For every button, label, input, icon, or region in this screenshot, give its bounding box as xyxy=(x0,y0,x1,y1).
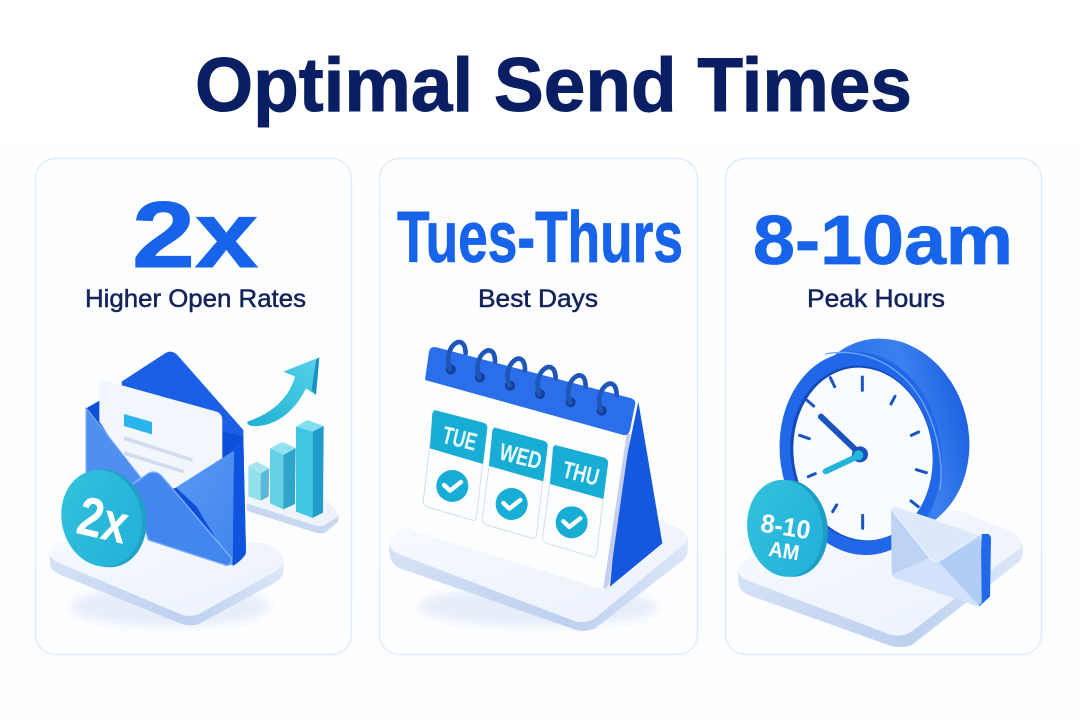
day card: thu xyxy=(542,445,608,557)
calendar top bar xyxy=(425,347,635,435)
stat: 2x: 2x xyxy=(132,182,258,287)
panel: best days xyxy=(380,158,698,654)
illustration: clock with envelope xyxy=(738,321,1023,647)
illustration: desk calendar xyxy=(389,342,688,631)
platform xyxy=(738,510,1023,647)
label: higher open rates: Higher Open Rates xyxy=(85,285,306,313)
platform xyxy=(389,520,688,631)
illustration: envelope with growth chart xyxy=(49,352,338,627)
stat: 8-10am: 8-10am xyxy=(753,201,1013,279)
day card: tue xyxy=(423,410,487,520)
badge: 2x xyxy=(52,462,155,575)
small envelope xyxy=(891,507,991,607)
envelope xyxy=(86,352,246,566)
bar chart xyxy=(248,420,324,518)
label: best days: Best Days xyxy=(478,285,598,313)
clock hands xyxy=(821,417,868,471)
clock ticks xyxy=(800,377,926,528)
growth arrow xyxy=(247,357,319,426)
panel: higher open rates xyxy=(36,158,352,654)
label: peak hours: Peak Hours xyxy=(807,285,945,313)
clock xyxy=(767,321,990,566)
title: Optimal Send Times xyxy=(195,43,912,128)
stat: tues-thurs: Tues-Thurs xyxy=(397,198,683,278)
calendar stand xyxy=(610,402,662,587)
chart platform xyxy=(247,497,338,534)
badge: 8-10 am xyxy=(741,475,834,582)
calendar page xyxy=(408,380,630,588)
badge: 8-10 am: AM xyxy=(767,537,801,565)
badge: 8-10 am: 8-10 xyxy=(759,508,813,545)
day card: wed: WED xyxy=(497,439,544,475)
badge: 2x: 2x xyxy=(72,484,135,556)
binder rings xyxy=(446,342,617,416)
paper letter xyxy=(99,380,222,488)
platform xyxy=(49,528,283,627)
day card: tue: TUE xyxy=(439,422,480,457)
day card: wed xyxy=(482,427,548,538)
panel: peak hours xyxy=(726,158,1042,654)
day card: thu: THU xyxy=(560,457,602,492)
